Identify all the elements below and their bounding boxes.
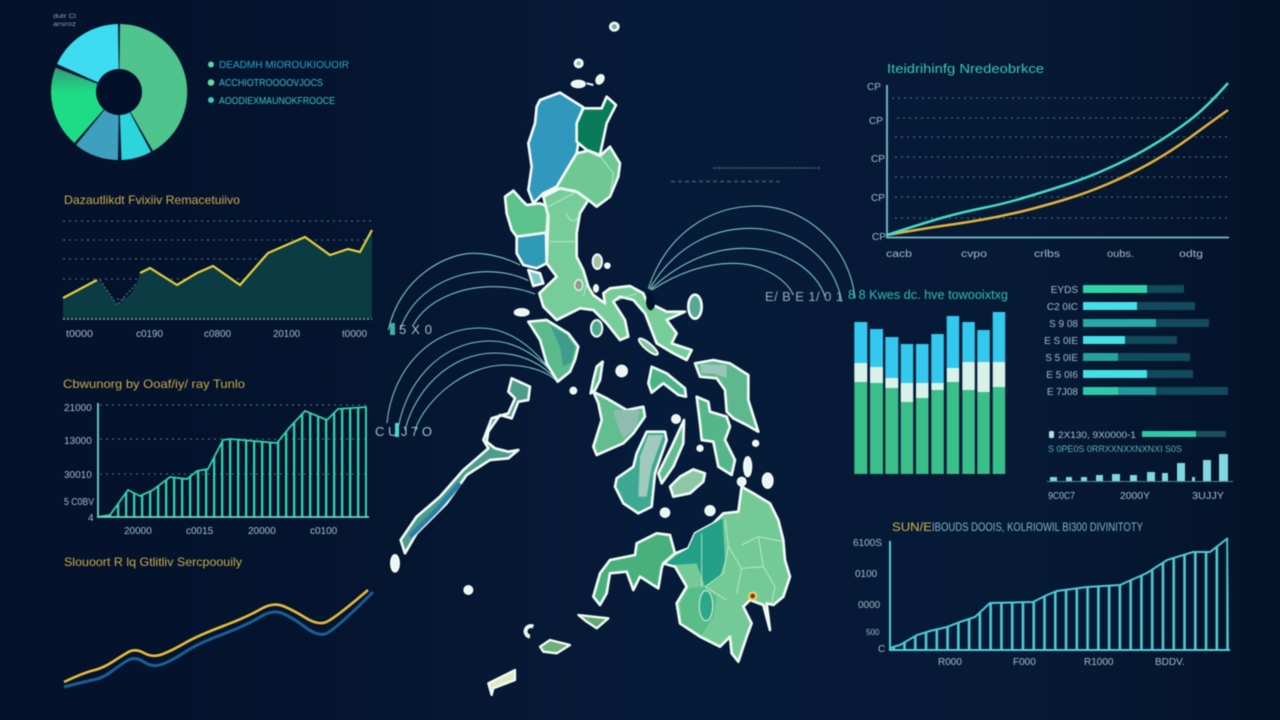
Cebu [658,420,684,483]
axis labels: 21000 [64,403,92,414]
mini labels: 2000Y [1120,491,1150,502]
row labels [1044,285,1078,398]
axis labels: 0100 [855,569,878,580]
heading: IBOUDS DOOIS, KOLRIOWIL BI300 DIVINITOTY [932,522,1143,534]
Samar pale top [700,364,727,378]
Mindoro [528,320,578,382]
heading: Cbwunorg by Ooaf/iy/ ray Tunlo [63,377,245,391]
bars under line [97,407,367,517]
Luzon: internal borders [548,156,637,302]
arc labels [375,289,843,439]
x labels [66,329,367,340]
Palawan [401,378,530,553]
blue line [64,592,373,687]
chart caption [53,14,76,28]
panel: horizontal progress bars [1044,285,1228,398]
row labels: E 7J08 [1047,387,1078,398]
donut slice: bright green [51,92,119,143]
heading: Iteidrihinfg Nredeobrkce [887,61,1044,76]
x labels: c0800 [204,329,231,340]
axis labels: c0015 [186,526,214,537]
Davao marker [748,591,757,601]
Palawan blue strip [410,483,460,537]
Luzon: Manila bay tip [528,270,543,286]
mini labels: 9C0C7 [1048,491,1075,502]
axis labels [64,403,338,537]
legend: ACCHIOTROOOOVJOCS [219,78,323,89]
Leyte [697,397,735,475]
mini bars [1050,454,1228,481]
map: Philippines north [505,23,702,382]
axis labels: CP [871,154,885,165]
axis labels: cacb [886,249,913,260]
arc labels: C U J 7 O [375,424,432,439]
Negros [615,432,667,513]
mini labels: 3UJJY [1192,491,1224,502]
arc labels: E/ B E 1/ 0 1 [765,289,843,304]
donut slice: muted green band [51,68,119,92]
axis labels: 20000 [248,526,276,537]
trend line [97,407,367,517]
Lanao ellipse [699,591,713,621]
yellow line [63,230,372,298]
axis labels: crlbs [1034,249,1060,260]
dim tracks [1083,285,1228,395]
arc labels: 5X0 [399,322,432,337]
x labels: c0190 [136,329,163,340]
Panay [593,392,645,455]
panel: dual smooth line chart [64,555,373,687]
Mindanao borders [702,520,783,603]
axis labels [867,82,1203,260]
Mindanao teal centre [667,518,725,587]
axis labels: CP [871,193,885,204]
small islets [391,366,773,594]
panel: bottom right bar-line chart [853,522,1230,668]
row labels: S 5 0IE [1045,353,1078,364]
row labels: E 5 0I6 [1046,370,1078,381]
lake marker [575,280,583,290]
trend line [890,538,1228,648]
Bohol [670,469,705,497]
axes [887,85,1229,238]
donut slice: cyan small [119,92,151,160]
axis labels: CP [869,116,883,127]
Mindanao main [663,487,790,662]
axis labels: F000 [1013,657,1036,668]
mini labels [1048,491,1224,502]
Mindoro teal part [550,325,575,367]
axis labels: 0000 [858,600,881,611]
Zamboanga peninsula [593,533,675,605]
axis labels: R000 [938,657,962,668]
axis labels: R1000 [1084,657,1114,668]
panel: green bar-line chart [63,377,369,537]
Luzon: western coast [505,191,548,237]
axis labels: odtg [1179,249,1203,260]
axis labels: 6100S [853,538,882,549]
area fill [63,230,372,318]
Luzon: north-west region [528,93,583,203]
axes [98,403,369,517]
axis labels: oubs. [1107,249,1134,260]
x labels: t0000 [342,329,367,340]
cyan bar segments [854,312,1005,383]
panel: stacked bar chart [848,288,1008,474]
cyan curve [887,83,1228,235]
connection arcs left upper [388,253,535,330]
axis labels: 4 [88,513,94,524]
legend: DEADMH MIOROUKIOUOIR [219,60,349,71]
axis labels: c0100 [310,526,338,537]
Luzon: central green [543,147,620,207]
donut slice: largest green [119,24,187,151]
subtitle: S 0PE0S 0RRXXNXXNXNXI S0S [1048,444,1182,455]
Sulu archipelago [488,615,608,695]
axis labels: BDDV. [1155,657,1185,668]
Masbate [648,367,686,397]
x labels: 20100 [273,329,300,340]
pill icon [1049,431,1054,438]
legend [208,60,349,107]
heading: SUN/E [892,522,932,534]
donut hole [96,69,142,115]
connection arcs right [648,206,855,302]
row labels: EYDS [1051,285,1078,296]
chart caption: dutr Cl [53,14,76,20]
Luzon: south-west region [517,233,547,268]
heading: Slouoort R lq Gtlitliv Sercpoouily [64,555,242,569]
progress bar [1142,431,1226,437]
panel: area line chart [63,193,372,340]
Mindanao south-west green [680,587,717,635]
panel: small bar chart [1047,430,1233,502]
panel: donut chart [51,14,187,160]
dashed dip [100,280,137,305]
map: Philippines south [391,360,790,695]
axis labels: 20000 [124,526,152,537]
axis labels: CP [867,82,881,93]
chart caption: arsroz [53,22,76,28]
white bar segments [854,362,1005,402]
caption: 2X130, 9X0000-1 [1058,430,1136,441]
filled segments [1083,285,1147,293]
donut slice: blue [76,92,119,160]
green bar segments [854,382,1005,474]
row labels: E S 0IE [1044,336,1078,347]
row labels: C2 0IC [1047,302,1078,313]
axis labels: 5 C0BV [64,497,94,508]
donut slice: light cyan [57,24,119,92]
row labels: S 9 08 [1049,319,1078,330]
Catanduanes and nearby islets [515,254,702,357]
northern islets [572,23,619,87]
bars under line [890,538,1229,650]
axes [890,541,1230,650]
legend: AOODIEXMAUNOKFROOCE [219,96,335,107]
panel: top right line chart [867,61,1229,260]
connection arcs left lower [387,328,558,437]
axis labels: C [878,644,885,655]
axis labels: 13000 [64,436,92,447]
Mindoro southern sliver [591,362,603,393]
Luzon: north-east region [577,97,616,155]
axis labels: 30010 [64,470,92,481]
heading: Dazautlikdt Fvixiiv Remacetuiivo [64,193,240,207]
Negros pale strip [638,435,663,497]
heading: 8 8 Kwes dc. hve towooixtxg [848,288,1008,302]
Panay grey centre [613,410,640,438]
yellow curve [887,110,1228,235]
axis labels: CP [872,232,886,243]
axis labels: cvpo [961,249,988,260]
axis labels: 500 [866,628,880,637]
yellow line [64,590,368,682]
Samar [695,360,758,432]
x labels: t0000 [66,329,93,340]
faint centre captions [671,168,820,182]
axis labels [853,538,1185,668]
Luzon: central plain and southern Luzon [539,188,692,360]
